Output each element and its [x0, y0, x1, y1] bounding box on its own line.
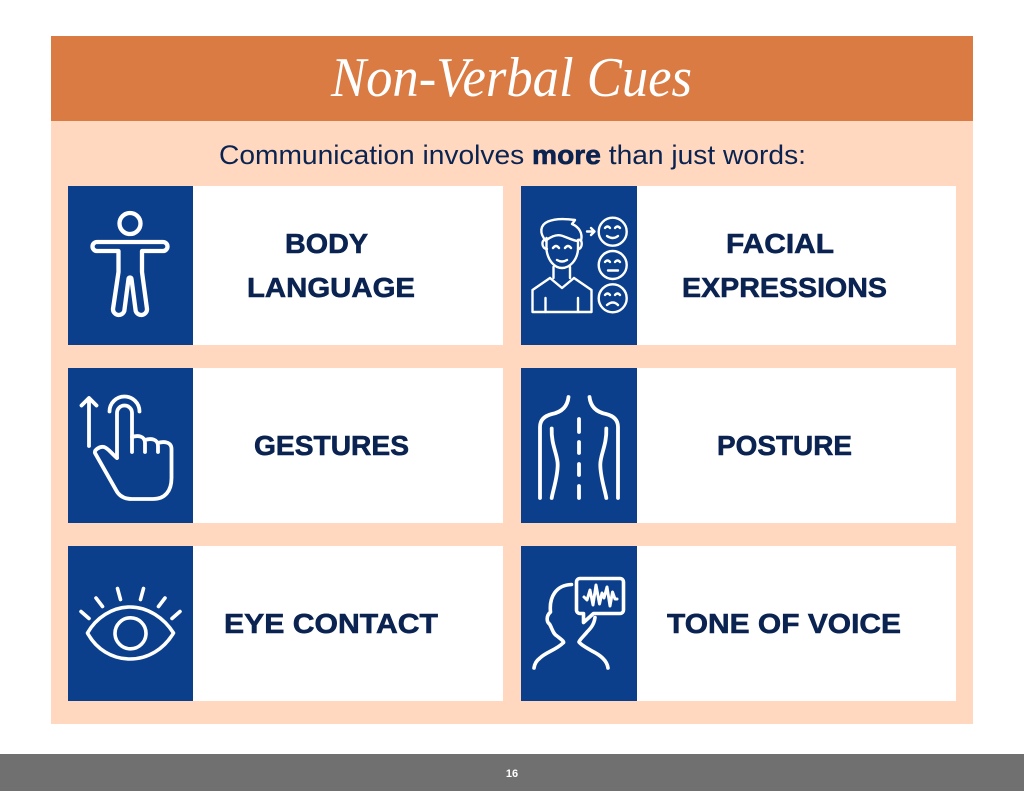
panel: gestures [68, 368, 503, 523]
subtitle: Communication involves more than just words: [219, 140, 806, 170]
panel: main background [51, 36, 973, 724]
panel: tone of voice [521, 546, 956, 701]
title: Non-Verbal Cues [330, 47, 692, 109]
label: body language: BODY [285, 228, 368, 259]
label: tone of voice: TONE OF VOICE [667, 608, 901, 639]
label: facial expressions: FACIAL [726, 228, 834, 259]
header band [51, 36, 973, 121]
label: body language: LANGUAGE [247, 272, 415, 303]
label: gestures: GESTURES [254, 430, 409, 461]
panel: body language [68, 186, 503, 345]
panel: eye contact [68, 546, 503, 701]
label: facial expressions [682, 228, 887, 303]
icon: pointing hand [82, 396, 172, 499]
icon: face with emoji [532, 218, 627, 312]
label: eye contact: EYE CONTACT [224, 608, 438, 639]
panel: facial expressions [521, 186, 956, 345]
label: body language [247, 228, 415, 303]
icon: eye [81, 588, 180, 659]
icon: back and spine [540, 397, 618, 498]
label: posture: POSTURE [717, 430, 852, 461]
icon: head with speech bubble [534, 578, 624, 668]
label: facial expressions: EXPRESSIONS [682, 272, 887, 303]
footer bar [0, 754, 1024, 791]
panel: posture [521, 368, 956, 523]
page number: 16 [506, 768, 518, 780]
icon: body figure [92, 213, 168, 315]
